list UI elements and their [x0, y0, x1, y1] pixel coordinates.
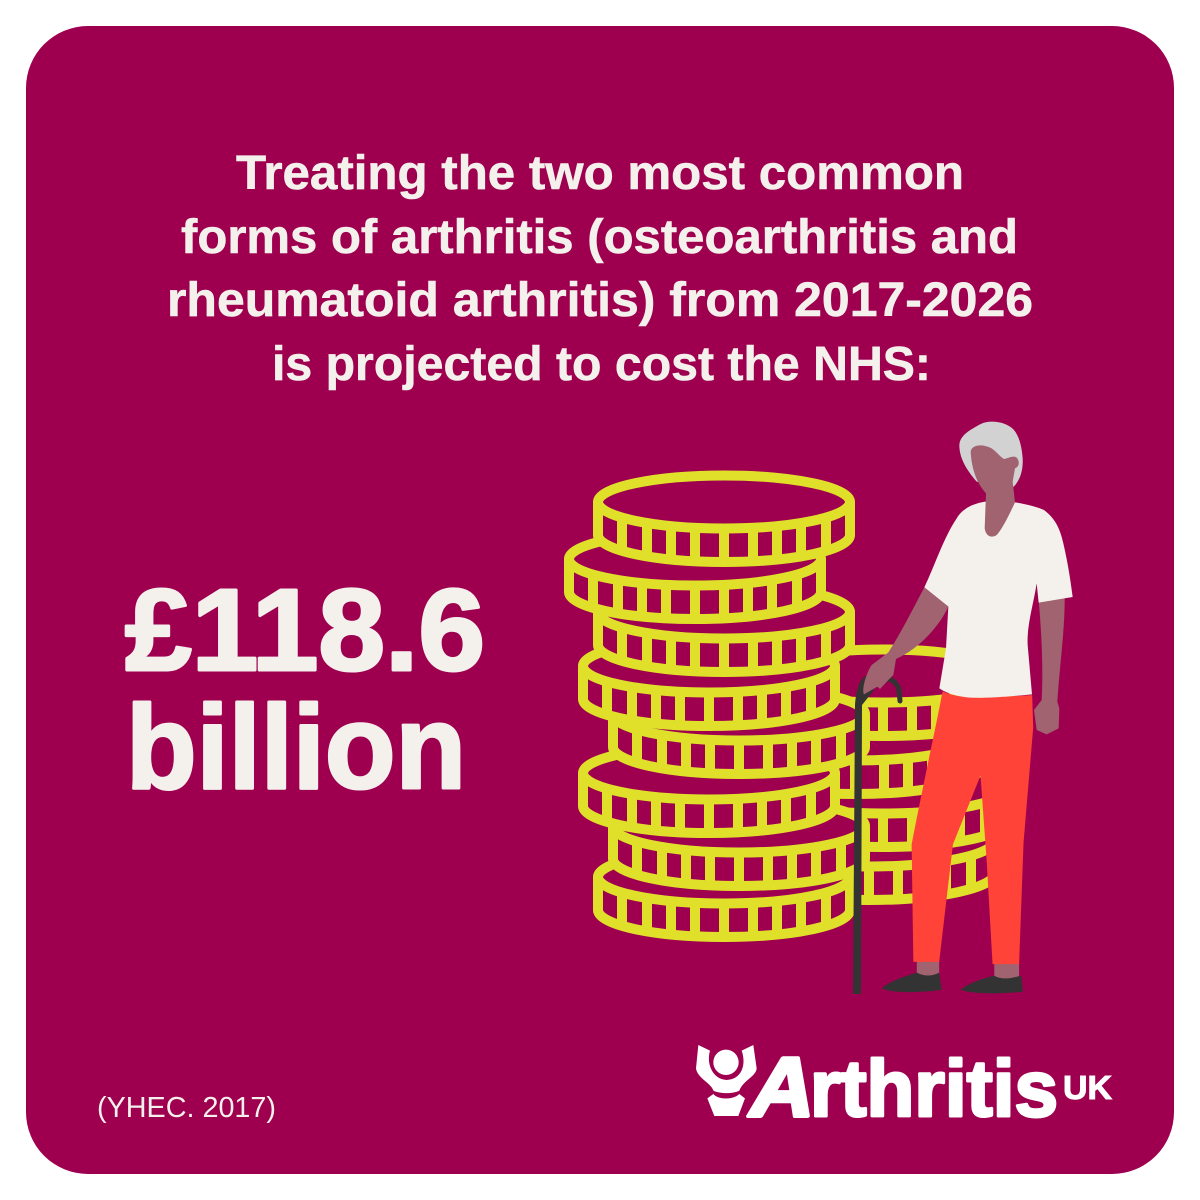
- walking cane: [853, 675, 900, 994]
- headline figure: cost: [125, 565, 485, 814]
- illustration: back stack of coins: [729, 650, 1009, 900]
- headline figure: cost: £118.6: [125, 565, 485, 695]
- ankles: [917, 959, 1019, 982]
- trousers: [912, 691, 1033, 964]
- logo: Arthritis UK: [696, 1040, 1112, 1134]
- logo wordmark: A: [742, 1040, 826, 1134]
- logo wordmark: rthritis: [810, 1044, 1058, 1133]
- front arm and hand: [863, 587, 948, 694]
- heading: rheumatoid arthritis) from 2017-2026: [167, 274, 1033, 327]
- rear arm: [1034, 597, 1065, 734]
- heading: is projected to cost the NHS:: [272, 338, 931, 391]
- lower body: [882, 691, 1033, 993]
- heading: Treating the two most common: [236, 147, 964, 200]
- headline figure: cost: billion: [126, 681, 466, 814]
- hair: [959, 422, 1023, 488]
- heading: forms of arthritis (osteoarthritis and: [181, 211, 1018, 264]
- upper body: [863, 422, 1073, 734]
- logo icon: figure with raised arms: [696, 1045, 757, 1116]
- source citation: (YHEC. 2017): [97, 1092, 276, 1124]
- logo suffix: UK: [1063, 1069, 1112, 1106]
- heading: [167, 147, 1033, 391]
- shoes: [882, 973, 1023, 993]
- face and neck: [971, 445, 1019, 537]
- shirt: [924, 502, 1073, 698]
- illustration: front stack of coins: [569, 476, 865, 937]
- illustration: older person with walking cane: [853, 422, 1073, 994]
